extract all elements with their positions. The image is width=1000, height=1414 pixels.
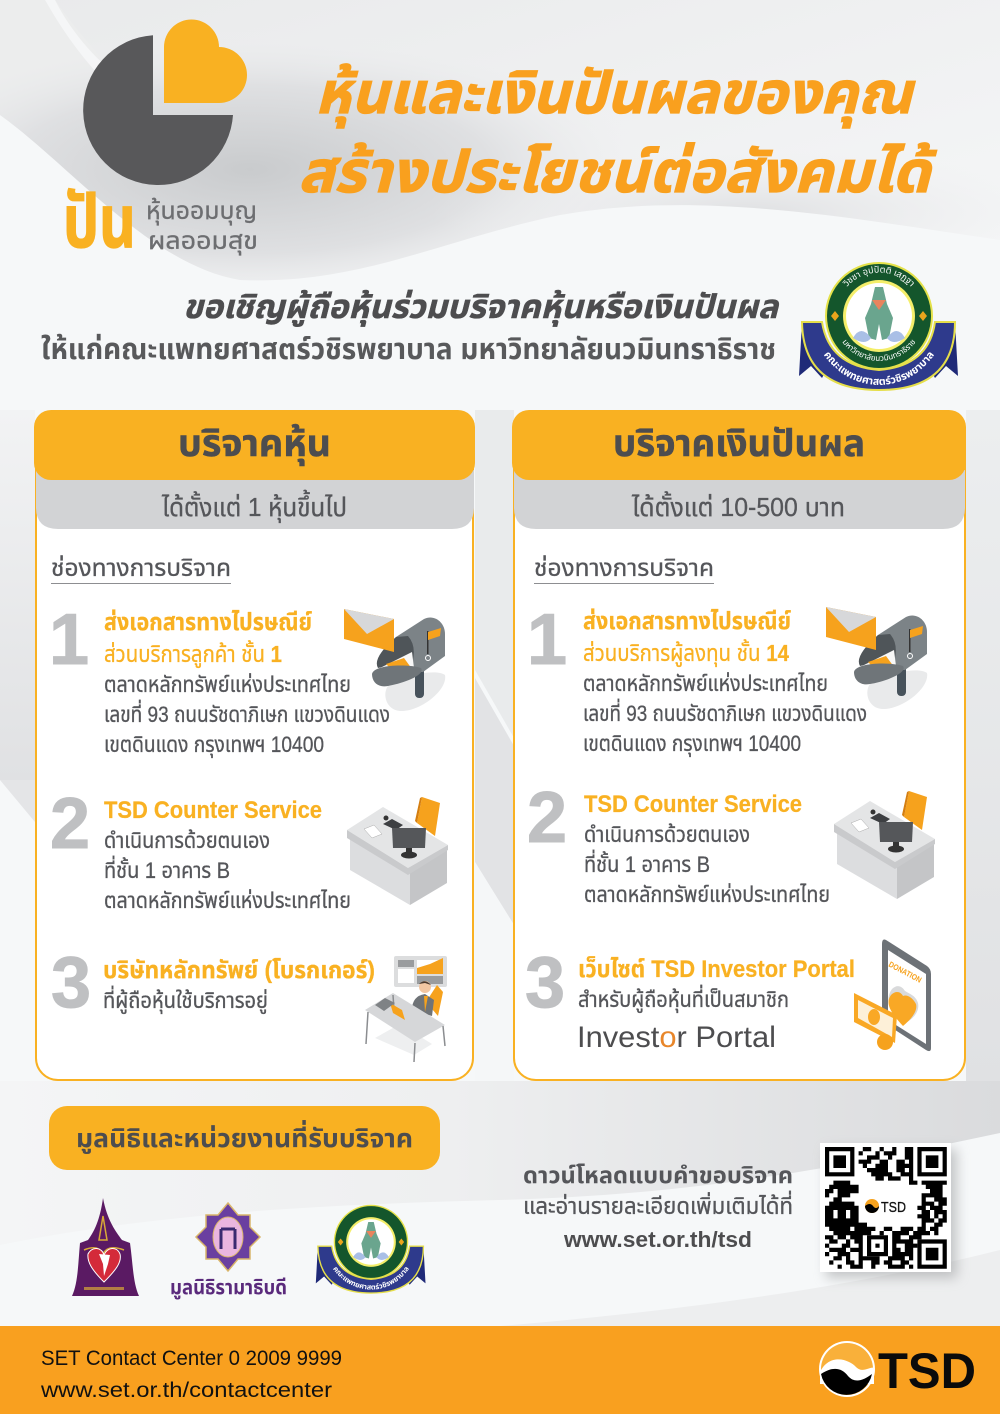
step 1 text [104, 608, 390, 758]
step 2 text: ดำเนินการด้วยตนเอง [104, 828, 270, 853]
step 1 text: เลขที่ 93 ถนนรัชดาภิเษก แขวงดินแดง [104, 699, 390, 727]
card body [514, 440, 965, 1080]
logo wordmark: ปัน [63, 180, 136, 263]
step 1 text: เลขที่ 93 ถนนรัชดาภิเษก แขวงดินแดง [583, 698, 867, 726]
step 3 number: 3 [525, 943, 565, 1023]
icon: faculty seal: คณะแพทยศาสตร์วชิรพยาบาล [824, 352, 934, 385]
icon: faculty seal: วิชชา อุปปัตติ เสฏฐา [842, 266, 914, 286]
icon: phone donation [854, 940, 931, 1051]
icon: phone donation: DONATION [887, 960, 923, 985]
step 1 text: ตลาดหลักทรัพย์แห่งประเทศไทย [583, 671, 828, 696]
TSD logo [819, 1341, 976, 1399]
step 1 number: 1 [49, 600, 89, 680]
logo pie [83, 35, 233, 185]
step 1 text: เขตดินแดง กรุงเทพฯ 10400 [583, 731, 801, 757]
step 1 text: ส่งเอกสารทางไปรษณีย์ [104, 608, 312, 636]
icon: broker at desk [365, 956, 447, 1062]
invitation text: ให้แก่คณะแพทยศาสตร์วชิรพยาบาล มหาวิทยาลัยนวมินทราธิราช [41, 334, 776, 366]
step 2 text: TSD Counter Service [104, 797, 322, 824]
step 1 text: ส่งเอกสารทางไปรษณีย์ [583, 607, 791, 635]
icon: faculty seal small: คณะแพทยศาสตร์วชิรพยาบาล [333, 1267, 409, 1290]
step 3 text: บริษัทหลักทรัพย์ (โบรกเกอร์) [103, 957, 375, 984]
QR code [820, 1143, 957, 1278]
header [512, 410, 966, 480]
step 2 text: ที่ชั้น 1 อาคาร B [584, 849, 710, 877]
contact text: www.set.or.th/contactcenter [40, 1379, 332, 1402]
logo tagline 1: หุ้นออมบุญ [146, 197, 257, 226]
footer bar [0, 1326, 1000, 1414]
icon: faculty seal: มหาวิทยาลัยนวมินทราธิราช [842, 340, 915, 361]
section label: foundations [49, 1106, 440, 1170]
contact text: SET Contact Center 0 2009 9999 [41, 1347, 342, 1370]
icon: mailbox [344, 609, 445, 711]
step 1 text [583, 607, 867, 757]
invitation text: ขอเชิญผู้ถือหุ้นร่วมบริจาคหุ้นหรือเงินปันผล [183, 288, 779, 327]
sub header [514, 470, 965, 529]
step 2 text [584, 791, 830, 907]
sub header: ได้ตั้งแต่ 1 หุ้นขึ้นไป [161, 489, 347, 523]
step 1 text: ส่วนบริการลูกค้า ชั้น 1 [104, 639, 282, 669]
header [34, 410, 475, 480]
step 2 text: ดำเนินการด้วยตนเอง [584, 822, 750, 847]
investor portal wordmark: Investor Portal [577, 1021, 776, 1054]
panel: donate shares [34, 410, 475, 1080]
header: บริจาคหุ้น [178, 423, 331, 466]
icon: faculty seal [799, 262, 958, 391]
TSD logo: TSD [878, 1343, 976, 1399]
step 2 text: TSD Counter Service [584, 791, 802, 818]
card body [36, 440, 473, 1080]
step 2 number: 2 [527, 778, 567, 858]
icon: mailbox [826, 607, 927, 709]
title: หุ้นและเงินปันผลของคุณ [315, 61, 916, 129]
step 3 text: ที่ผู้ถือหุ้นใช้บริการอยู่ [103, 985, 268, 1014]
step 1 text: ตลาดหลักทรัพย์แห่งประเทศไทย [104, 672, 351, 697]
download text: ดาวน์โหลดแบบคำขอบริจาค [523, 1162, 793, 1188]
icon: service desk [834, 791, 935, 899]
sub header: ได้ตั้งแต่ 10-500 บาท [631, 490, 845, 522]
step 3 text [103, 957, 375, 1014]
logo tagline 2: ผลออมสุข [148, 227, 258, 256]
download text [523, 1162, 793, 1252]
invitation text [41, 288, 779, 366]
icon: Ramathibodi foundation emblem [196, 1203, 260, 1271]
sub header [36, 470, 474, 529]
channels heading: ช่องทางการบริจาค [534, 554, 714, 582]
download text: และอ่านรายละเอียดเพิ่มเติมได้ที่ [523, 1190, 793, 1219]
step 2 text [104, 797, 351, 913]
download text: www.set.or.th/tsd [563, 1227, 752, 1252]
icon: faculty seal small [316, 1204, 426, 1294]
step 2 number: 2 [50, 784, 90, 864]
section label: foundations: มูลนิธิและหน่วยงานที่รับบริจาค [76, 1120, 413, 1154]
panel: donate dividends [512, 410, 966, 1080]
step 2 text: ตลาดหลักทรัพย์แห่งประเทศไทย [104, 888, 351, 913]
title [298, 61, 938, 205]
step 3 text: สำหรับผู้ถือหุ้นที่เป็นสมาชิก [578, 984, 789, 1013]
step 3 text: เว็บไซต์ TSD Investor Portal [578, 956, 855, 983]
step 3 text [578, 956, 855, 1013]
icon: purple bell foundation [72, 1198, 139, 1296]
icon: service desk [347, 797, 448, 905]
step 3 number: 3 [51, 943, 91, 1023]
logo: ปัน หุ้นออมบุญ ผลออมสุข [63, 20, 258, 263]
step 2 text: ที่ชั้น 1 อาคาร B [104, 855, 230, 883]
logo heart [164, 20, 247, 103]
QR centre logo: TSD [881, 1199, 906, 1216]
title: สร้างประโยชน์ต่อสังคมได้ [298, 140, 938, 205]
contact text [40, 1347, 342, 1402]
header: บริจาคเงินปันผล [613, 423, 865, 464]
foundation name: มูลนิธิรามาธิบดี [170, 1277, 287, 1299]
step 1 number: 1 [527, 600, 567, 680]
step 1 text: ส่วนบริการผู้ลงทุน ชั้น 14 [583, 638, 789, 668]
step 2 text: ตลาดหลักทรัพย์แห่งประเทศไทย [584, 882, 830, 907]
channels heading: ช่องทางการบริจาค [51, 554, 231, 582]
step 1 text: เขตดินแดง กรุงเทพฯ 10400 [104, 732, 324, 758]
